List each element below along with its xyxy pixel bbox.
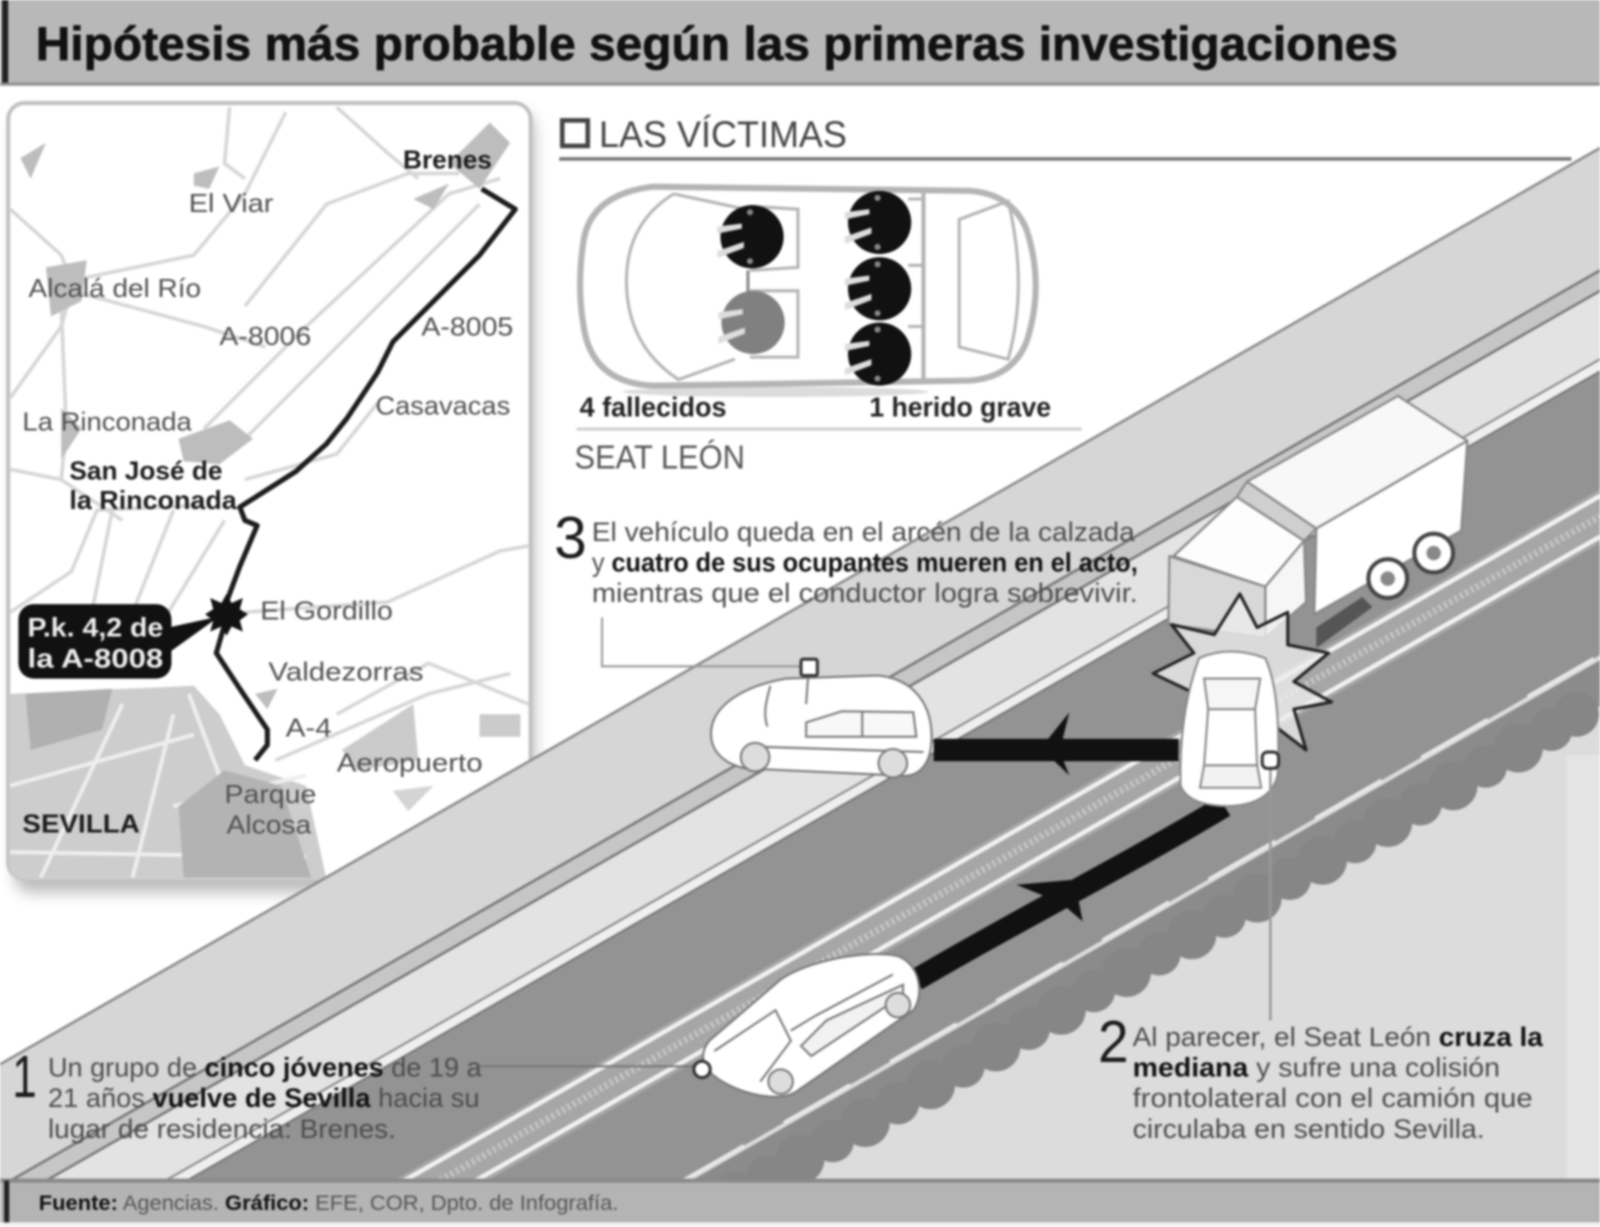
map: place labels: Brenes — [403, 146, 492, 174]
map: place labels: Valdezorras — [268, 659, 423, 687]
occupant: front deceased 3 — [845, 322, 911, 386]
footer: sources: Fuente: Agencias. Gráfico: EFE, COR, Dpto. de Infografía. — [39, 1191, 618, 1215]
map: place labels: San José de — [69, 458, 222, 486]
footer: sources — [0, 1179, 1600, 1227]
map: town areas — [20, 122, 510, 709]
icon: collision burst — [1153, 594, 1332, 776]
text block: step 1 — [12, 1043, 710, 1144]
map: place labels: El Gordillo — [260, 597, 393, 625]
text block: step 2: circulaba en sentido Sevilla. — [1133, 1114, 1485, 1144]
map: route — [216, 189, 515, 760]
map: place labels: Parque — [224, 781, 316, 809]
arrow: crossing direction — [916, 806, 1224, 980]
text block: step 2 — [1098, 752, 1543, 1144]
title bar — [0, 0, 1600, 86]
map: place labels: La Rinconada — [22, 409, 193, 437]
map: secondary roads — [10, 107, 529, 760]
heading: las víctimas — [559, 114, 1571, 161]
title bar: Hipótesis más probable según las primeras investigaciones — [36, 18, 1398, 70]
map: accident callout: P.k. 4,2 de — [28, 613, 163, 643]
map: place labels: Alcalá del Río — [29, 275, 201, 303]
text block: step 3 — [554, 504, 1138, 704]
map: accident marker — [205, 594, 248, 636]
illustration: truck — [1168, 396, 1467, 648]
panel: car occupants diagram — [574, 187, 1082, 476]
heading: las víctimas: LAS VÍCTIMAS — [599, 114, 847, 155]
occupant: front deceased 2 — [845, 257, 911, 320]
victim counts: 4 fallecidos — [580, 391, 727, 422]
text block: step 1: lugar de residencia: Brenes. — [48, 1114, 396, 1144]
illustration: car on shoulder — [711, 676, 932, 778]
map: accident callout — [18, 604, 219, 679]
text block: step 3: 3 — [554, 504, 587, 571]
illustration: roadside hedge — [678, 655, 1600, 1221]
map: Sevilla urban area — [9, 686, 520, 880]
text block: step 1: Un grupo de cinco jóvenes de 19 a — [48, 1053, 482, 1083]
panel: location map — [8, 103, 535, 893]
text block: step 3: mientras que el conductor logra sobrevivir. — [592, 578, 1138, 608]
map: accident callout: la A-8008 — [28, 643, 163, 673]
car model label: SEAT LEÓN — [574, 438, 745, 476]
text block: step 3: y cuatro de sus ocupantes mueren en el acto, — [592, 547, 1138, 577]
occupant: driver injured — [718, 291, 785, 354]
map: place labels: Alcosa — [227, 812, 312, 840]
car top view — [580, 187, 1036, 386]
map: place labels: A-4 — [286, 715, 332, 743]
map: place labels: la Rinconada — [69, 487, 238, 515]
map: place labels — [22, 146, 513, 840]
text block: step 1: 21 años vuelve de Sevilla hacia su — [48, 1083, 480, 1113]
illustration: crashed car — [1180, 652, 1278, 806]
arrow: drift to shoulder — [934, 712, 1179, 776]
map: place labels: Casavacas — [376, 392, 510, 420]
victim counts — [580, 391, 1051, 422]
text block: step 2: mediana y sufre una colisión — [1133, 1053, 1500, 1083]
map: place labels: Aeropuerto — [337, 749, 483, 777]
text block: step 2: 2 — [1098, 1008, 1129, 1075]
map: place labels: SEVILLA — [22, 811, 140, 839]
text block: step 2: frontolateral con el camión que — [1133, 1083, 1533, 1113]
map: place labels: A-8005 — [421, 314, 513, 342]
victim counts: 1 herido grave — [869, 391, 1051, 422]
text block: step 1: 1 — [12, 1043, 37, 1110]
occupant: rear left deceased — [717, 205, 784, 268]
text block: step 2: Al parecer, el Seat León cruza la — [1133, 1022, 1543, 1052]
map: place labels: A-8006 — [219, 323, 311, 351]
occupant: front deceased 1 — [845, 191, 911, 254]
text block: step 3: El vehículo queda en el arcén de la calzada — [592, 517, 1135, 547]
illustration: car before crossing — [703, 954, 919, 1097]
map: place labels: El Viar — [189, 190, 274, 218]
